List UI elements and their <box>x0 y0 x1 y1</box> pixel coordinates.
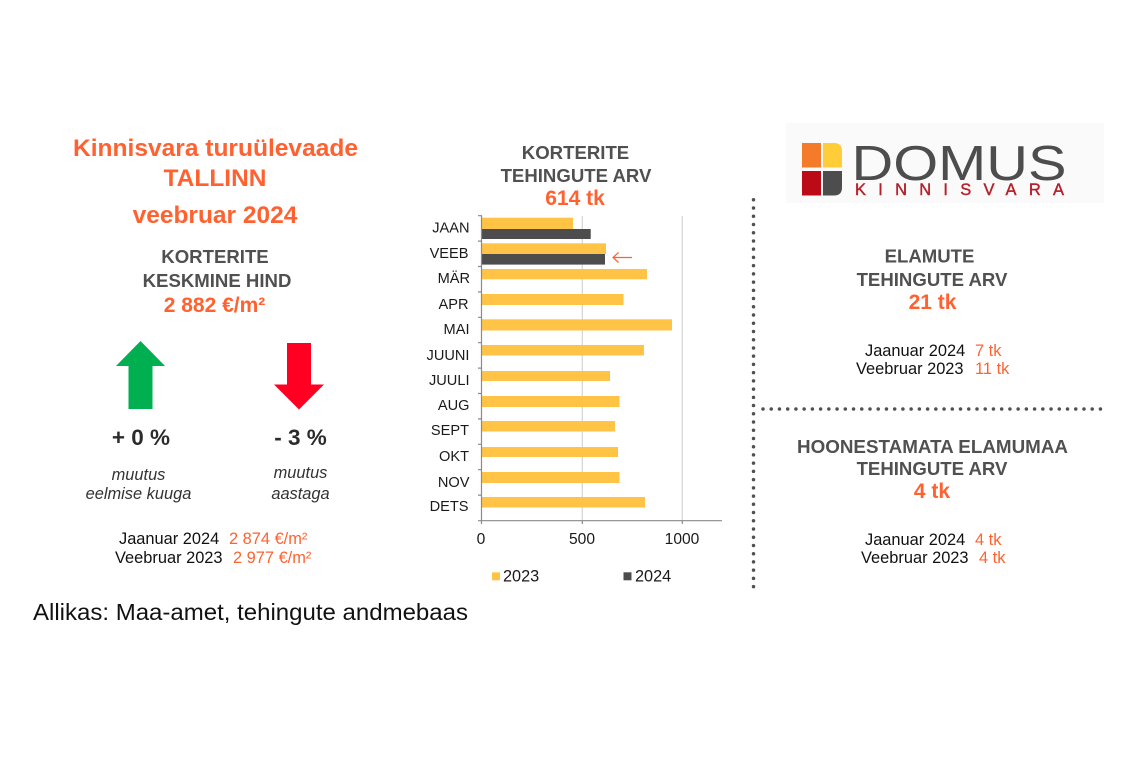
value: apartment transactions: 614 tk <box>545 187 605 210</box>
category labels: MAI <box>444 322 470 338</box>
icon: green up arrow <box>116 341 165 409</box>
logo subtitle: KINNISVARA <box>855 181 1064 199</box>
comparison: January 2024 land: 4 tk <box>975 531 1002 549</box>
heading: report title: Kinnisvara turuülevaade <box>73 135 358 162</box>
axis values <box>477 531 700 548</box>
axis values: 500 <box>569 531 595 548</box>
heading: land: HOONESTAMATA ELAMUMAA <box>797 436 1068 457</box>
heading: chart title: KORTERITE <box>522 142 629 163</box>
heading: average price second line: KESKMINE HIND <box>143 270 291 291</box>
bars: 2024 <box>482 229 605 265</box>
comparison: February 2023 price: 2 977 €/m² <box>233 549 312 567</box>
comparison: January 2024 price: Jaanuar 2024 <box>119 530 219 548</box>
panel: apartment average price <box>86 246 330 567</box>
category labels: DETS <box>430 499 469 515</box>
comparison: February 2023 houses: 11 tk <box>975 360 1010 378</box>
comparison: February 2023 price: Veebruar 2023 <box>115 549 223 567</box>
panel: title <box>73 135 358 229</box>
heading: houses second line: TEHINGUTE ARV <box>857 269 1008 290</box>
category labels: APR <box>438 297 468 313</box>
heading: land second line: TEHINGUTE ARV <box>857 458 1008 479</box>
category labels: VEEB <box>430 246 468 262</box>
label: yearly change: muutus <box>274 464 327 482</box>
bars: 2023 <box>482 218 672 507</box>
category labels: NOV <box>438 475 470 491</box>
value: yearly change: - 3 % <box>274 425 327 450</box>
panel: undeveloped land <box>797 436 1068 567</box>
heading: average price: KORTERITE <box>161 246 269 267</box>
heading: chart title second line: TEHINGUTE ARV <box>501 165 652 186</box>
legend <box>492 568 671 586</box>
source note: Allikas: Maa-amet, tehingute andmebaas <box>33 599 468 625</box>
comparison: February 2023 land: 4 tk <box>979 549 1006 567</box>
category labels <box>427 220 470 515</box>
heading: city: TALLINN <box>164 165 266 192</box>
comparison: January 2024 price: 2 874 €/m² <box>229 530 308 548</box>
category labels: AUG <box>438 398 470 414</box>
category labels: SEPT <box>431 423 469 439</box>
comparison: January 2024 houses: Jaanuar 2024 <box>865 342 965 360</box>
value: monthly change: + 0 % <box>112 425 170 450</box>
heading: month: veebruar 2024 <box>133 202 298 229</box>
comparison: January 2024 land: Jaanuar 2024 <box>865 531 965 549</box>
legend: 2023 <box>503 568 539 586</box>
category labels: MÄR <box>438 270 470 287</box>
bar chart <box>427 216 722 585</box>
comparison: January 2024 houses: 7 tk <box>975 342 1002 360</box>
label: yearly change: aastaga <box>271 485 330 503</box>
comparison: February 2023 land: Veebruar 2023 <box>861 549 969 567</box>
panel: houses <box>856 246 1010 378</box>
axis values: 1000 <box>665 531 700 548</box>
comparison: February 2023 houses: Veebruar 2023 <box>856 360 964 378</box>
category labels: JUULI <box>429 373 470 389</box>
category labels: JUUNI <box>427 348 470 364</box>
value: average price: 2 882 €/m² <box>164 294 265 317</box>
icon: red down arrow <box>274 343 324 410</box>
logo wordmark: DOMUS <box>852 137 1066 191</box>
panel: apartment transactions chart <box>427 142 722 586</box>
axes <box>478 216 722 524</box>
icon: arrow pointing to February <box>613 252 632 262</box>
axis values: 0 <box>477 531 486 548</box>
legend: 2024 <box>635 568 671 586</box>
category labels: OKT <box>439 449 469 465</box>
label: monthly change: eelmise kuuga <box>86 485 191 503</box>
logo mark <box>802 143 842 196</box>
category labels: JAAN <box>432 220 470 236</box>
value: houses: 21 tk <box>909 291 957 314</box>
label: monthly change: muutus <box>112 466 165 484</box>
value: land: 4 tk <box>914 480 950 503</box>
logo: Domus Kinnisvara <box>786 123 1104 203</box>
dividers <box>754 200 1103 590</box>
heading: houses: ELAMUTE <box>885 246 974 266</box>
